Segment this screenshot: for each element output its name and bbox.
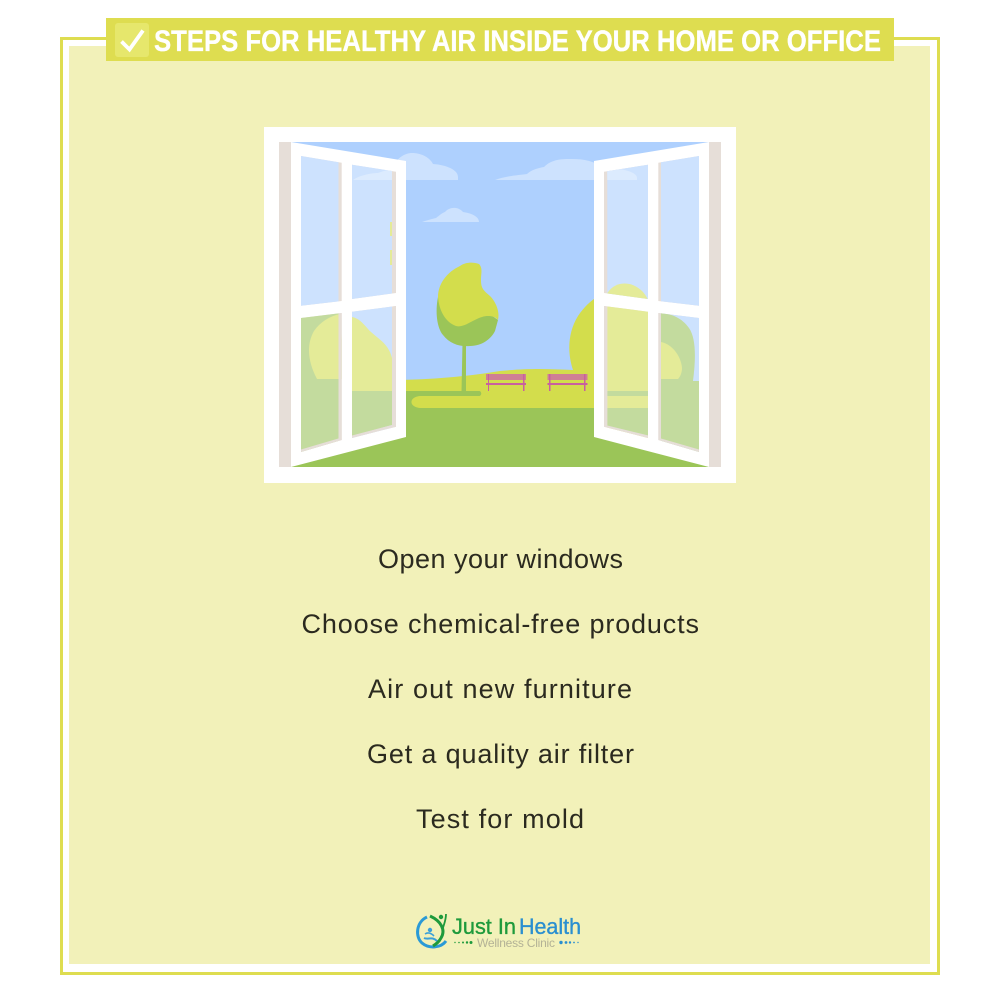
right sash — [594, 142, 709, 467]
step 5: Test for mold — [416, 804, 584, 834]
upper panes — [301, 156, 342, 306]
logo wordmark: Just In — [452, 914, 516, 939]
window outer frame — [264, 127, 736, 483]
bench left — [486, 374, 526, 391]
title banner — [106, 18, 894, 61]
step 3: Air out new furniture — [368, 674, 632, 704]
left sash — [291, 142, 406, 467]
bench right — [548, 374, 588, 391]
upper panes — [604, 165, 648, 299]
logo tagline: Wellness Clinic — [477, 936, 555, 950]
step 2: Choose chemical-free products — [302, 609, 699, 639]
logo: Just In Health Wellness Clinic: Health — [519, 914, 581, 939]
title text: STEPS FOR HEALTHY AIR INSIDE YOUR HOME OR OFFICE — [154, 25, 881, 58]
wall reveal strips — [279, 142, 291, 467]
step 1: Open your windows — [378, 544, 623, 574]
tree — [437, 263, 499, 392]
hills — [406, 369, 573, 408]
logo: Just In Health Wellness Clinic — [418, 914, 581, 950]
park scene — [279, 142, 721, 467]
logo icon — [418, 914, 446, 947]
lower panes — [604, 306, 648, 440]
illustration: open window with park view — [264, 127, 736, 483]
clouds — [398, 153, 594, 222]
step 4: Get a quality air filter — [367, 739, 634, 769]
list of steps — [302, 544, 699, 834]
logo dots — [454, 941, 579, 944]
lower panes — [301, 313, 342, 454]
icon: checkmark — [115, 23, 149, 57]
lawn — [279, 391, 721, 467]
